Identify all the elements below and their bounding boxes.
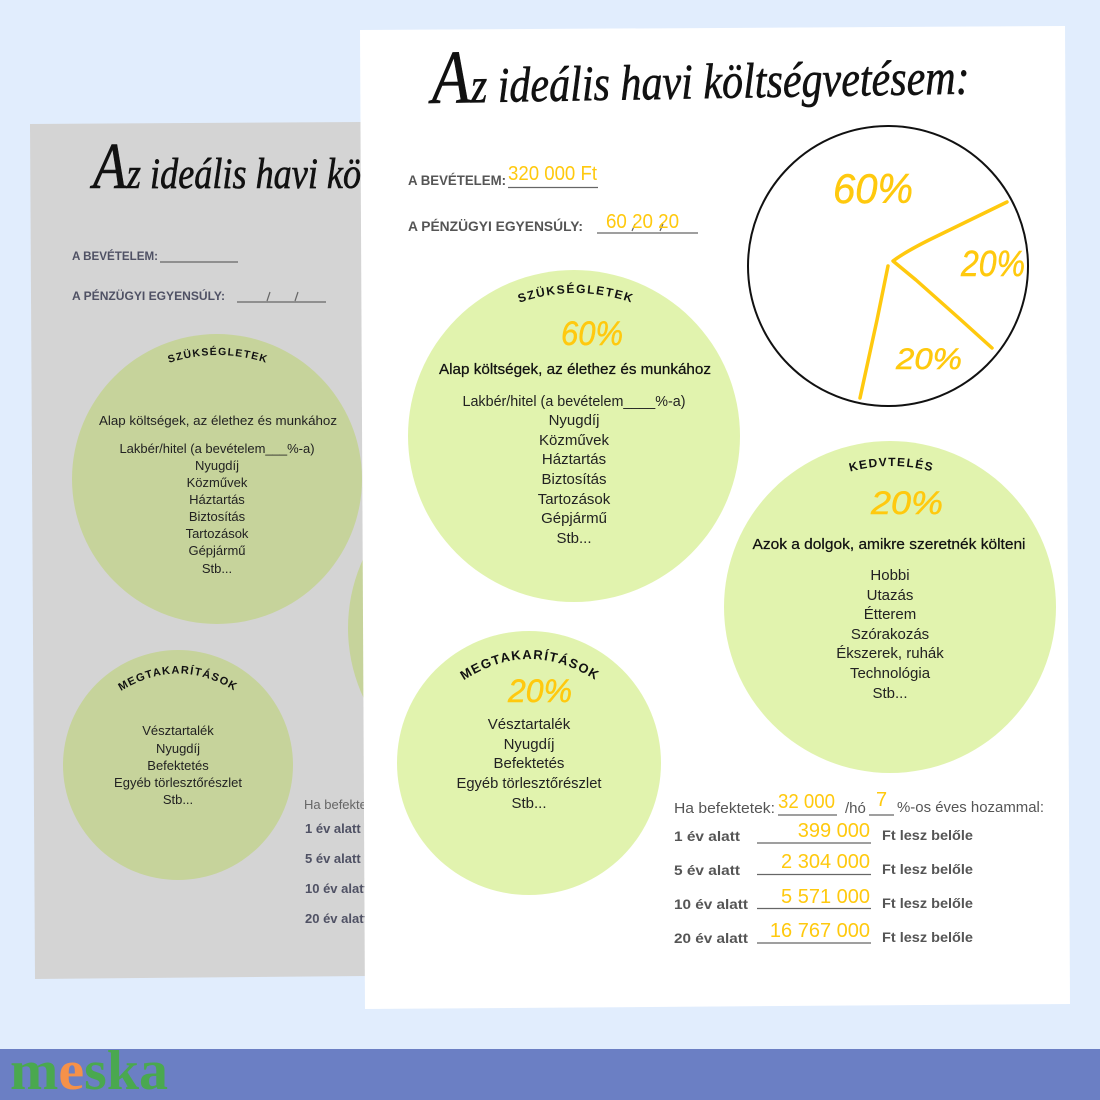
needs list: Közművek (539, 432, 610, 449)
needs list: Lakbér/hitel (a bevételem____%-a) (462, 393, 686, 410)
row: 1 year: 399 000 (798, 820, 870, 842)
grey circle: needs: Gépjármű (188, 543, 246, 558)
row: 5 years: 5 év alatt (674, 862, 740, 878)
row: 10 years: Ft lesz belőle (882, 895, 973, 911)
panel: white filled worksheet (360, 26, 1070, 1009)
handwritten 20 percent: 20% (507, 673, 572, 709)
grey circle: savings: Vésztartalék (142, 723, 214, 738)
investment sentence: %-os éves hozammal: (897, 799, 1044, 816)
grey circle: needs: Tartozások (186, 526, 249, 541)
circle: leisure (724, 441, 1056, 773)
needs list: Nyugdíj (549, 412, 599, 429)
row: 20 years: 20 év alatt (674, 930, 748, 946)
grey circle: needs: Biztosítás (189, 509, 246, 524)
grey circle: needs (72, 334, 362, 624)
grey circle: needs: Háztartás (189, 492, 245, 507)
needs list: Tartozások (538, 491, 611, 508)
circle: savings (397, 631, 661, 895)
financial balance field (408, 211, 698, 234)
row: 20 years: Ft lesz belőle (882, 929, 973, 945)
leisure list: Stb... (872, 685, 908, 702)
row: 10 years: 10 év alatt (674, 896, 748, 912)
heading: savings: MEGTAKARÍTÁSOK (460, 649, 600, 680)
main title: Az ideális havi költségvetésem: (427, 27, 970, 120)
investment sentence: 7 (876, 789, 887, 811)
leisure list: Szórakozás (851, 626, 929, 643)
grey balance label and blank: A PÉNZÜGYI EGYENSÚLY: (72, 288, 225, 303)
needs list: Gépjármű (541, 510, 607, 527)
grey circle: needs: Alap költségek, az élethez és munkához (99, 413, 337, 428)
handwritten 60 percent: 60% (561, 315, 623, 353)
financial balance field: A PÉNZÜGYI EGYENSÚLY: (408, 219, 583, 234)
grey investment rows: 1 év alatt (305, 821, 361, 836)
row: 5 years: 2 304 000 (781, 851, 870, 873)
grey circle: needs: Stb... (202, 561, 232, 576)
needs description: Alap költségek, az élethez és munkához (439, 361, 711, 378)
income field (408, 163, 598, 188)
leisure list: Utazás (867, 587, 913, 604)
savings list: Befektetés (494, 755, 564, 772)
row: 5 years: Ft lesz belőle (882, 861, 973, 877)
financial balance field: 60 20 20 (606, 211, 679, 233)
grey investment rows (304, 797, 388, 926)
leisure list (836, 567, 944, 702)
leisure list: Technológia (850, 665, 931, 682)
grey circle: savings (63, 650, 293, 880)
leisure list: Hobbi (870, 567, 910, 584)
heading: leisure: KEDVTELÉS (849, 458, 932, 472)
grey circle: savings: Nyugdíj (156, 741, 200, 756)
savings list: Stb... (511, 795, 547, 812)
grey circle: needs: Közművek (187, 475, 248, 490)
pie chart: hand-drawn 60/20/20 split: 60% (833, 165, 913, 212)
leisure list: Ékszerek, ruhák (836, 645, 944, 662)
row: 1 year: 1 év alatt (674, 828, 740, 844)
pie chart: hand-drawn 60/20/20 split: 20% (960, 243, 1025, 284)
circle: needs (408, 270, 740, 602)
row: 20 years: 16 767 000 (770, 920, 870, 942)
investment sentence: /hó (845, 800, 866, 817)
needs list (462, 393, 686, 547)
investment sentence (674, 789, 1044, 817)
savings list (456, 716, 602, 812)
row: 10 years (674, 886, 973, 912)
grey investment rows: 20 év alatt (305, 911, 369, 926)
investment sentence: Ha befektetek: (674, 800, 775, 817)
needs list: Stb... (556, 530, 592, 547)
savings list: Nyugdíj (504, 736, 554, 753)
grey circle: needs: Nyugdíj (195, 458, 239, 473)
pie chart: hand-drawn 60/20/20 split: 20% (895, 343, 962, 376)
grey income label and blank: A BEVÉTELEM: (72, 248, 158, 263)
grey investment rows: 10 év alatt (305, 881, 369, 896)
needs list: Biztosítás (541, 471, 607, 488)
grey circle: savings: MEGTAKARÍTÁSOK (118, 664, 238, 691)
income field: 320 000 Ft (508, 163, 597, 185)
grey circle: savings: Egyéb törlesztőrészlet (114, 775, 242, 790)
grey circle: savings: Stb... (163, 792, 193, 807)
income field: A BEVÉTELEM: (408, 173, 506, 188)
grey circle: leisure, mostly hidden (348, 463, 678, 793)
row: 1 year (674, 820, 973, 844)
grey circle: needs: SZÜKSÉGLETEK (168, 346, 268, 363)
leisure list: Étterem (864, 606, 916, 623)
savings list: Vésztartalék (488, 716, 571, 733)
investment calculator (674, 789, 1044, 946)
row: 1 year: Ft lesz belőle (882, 827, 973, 843)
needs list: Háztartás (542, 451, 606, 468)
heading: needs: SZÜKSÉGLETEK (518, 282, 634, 302)
leisure description: Azok a dolgok, amikre szeretnék költeni (752, 536, 1026, 553)
grey balance label and blank (72, 288, 326, 303)
grey investment rows: 5 év alatt (305, 851, 361, 866)
savings list: Egyéb törlesztőrészlet (456, 775, 602, 792)
pie chart: hand-drawn 60/20/20 split (748, 126, 1028, 406)
grey investment rows: Ha befektetek: (304, 797, 388, 812)
row: 5 years (674, 851, 973, 878)
grey circle: savings: Befektetés (147, 758, 209, 773)
investment sentence: 32 000 (778, 791, 835, 813)
footer bar (0, 1049, 1100, 1100)
row: 20 years (674, 920, 973, 946)
handwritten 20 percent: 20% (870, 485, 943, 521)
row: 10 years: 5 571 000 (781, 886, 870, 908)
panel: grey blank worksheet behind (30, 122, 556, 979)
grey worksheet title: Az ideális havi költségvetésem: (90, 130, 556, 203)
grey circle: needs: Lakbér/hitel (a bevételem___%-a) (119, 441, 315, 456)
